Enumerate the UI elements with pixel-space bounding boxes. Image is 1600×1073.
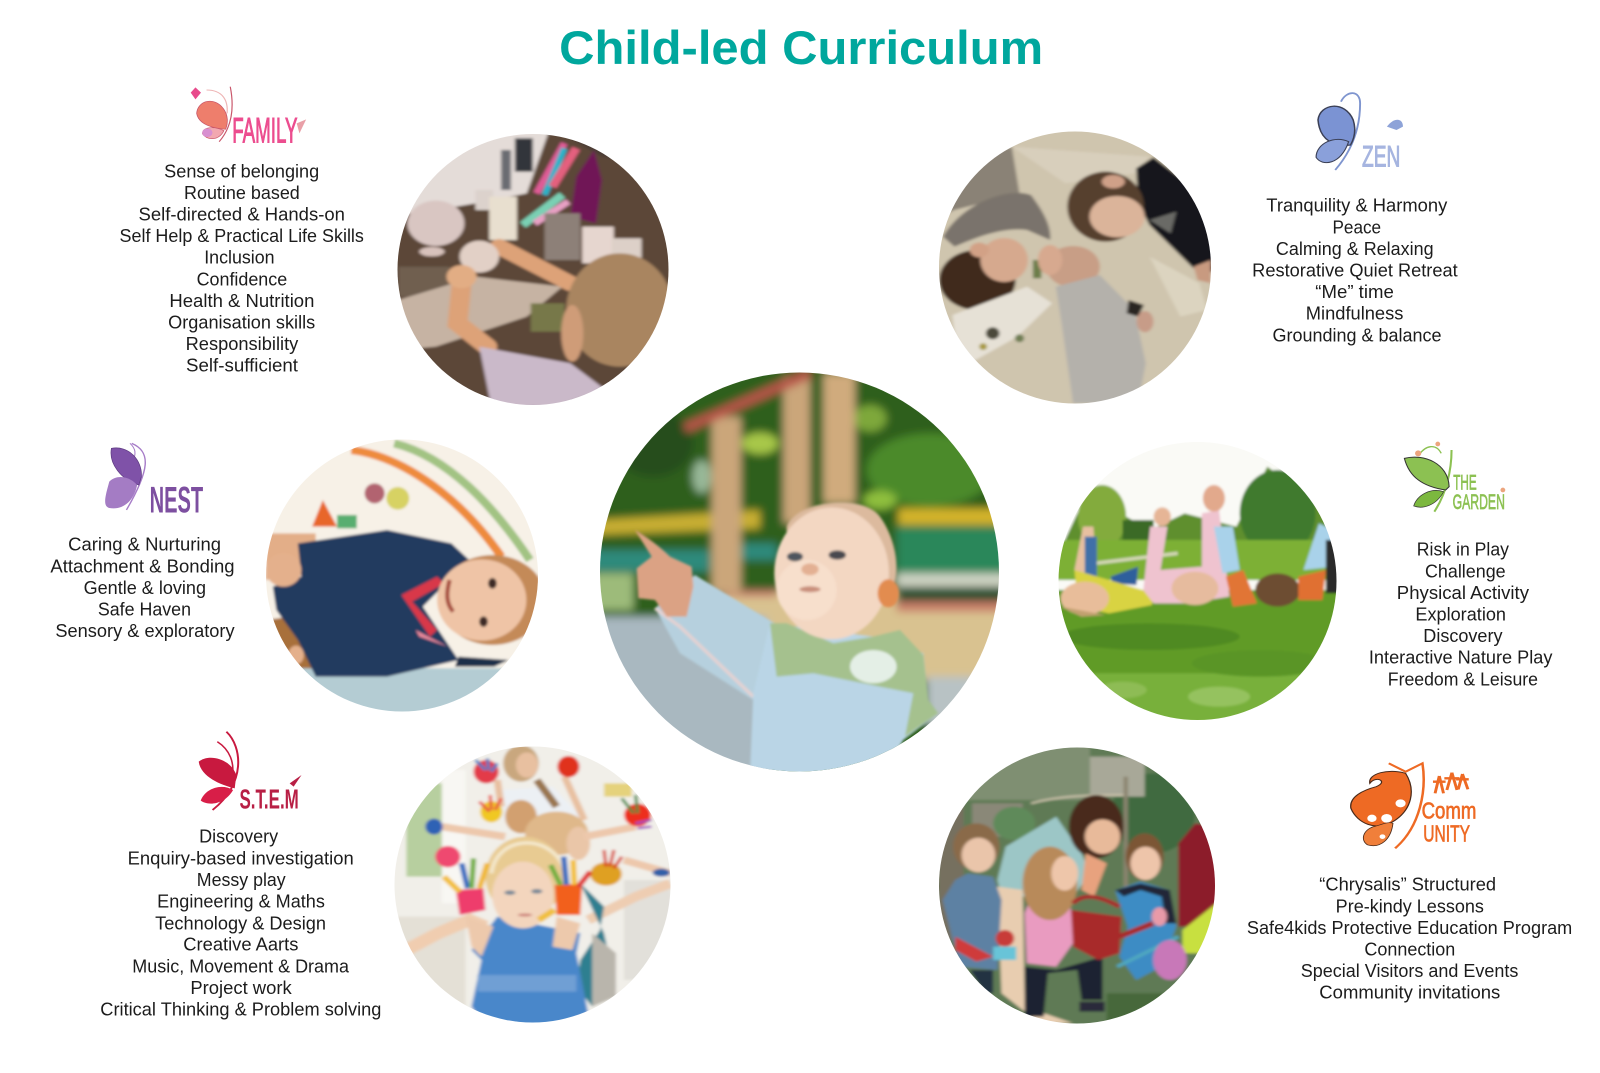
logo: community butterfly: Comm — [1422, 799, 1476, 824]
text list: nest — [50, 535, 235, 641]
text list: garden: Freedom & Leisure — [1388, 669, 1538, 689]
photo: children showing painted hands — [394, 746, 670, 1022]
text list: garden: Physical Activity — [1397, 583, 1529, 603]
text list: community: “Chrysalis” Structured — [1319, 875, 1496, 895]
text list: stem: Enquiry-based investigation — [128, 848, 354, 868]
text list: zen: Calming & Relaxing — [1276, 239, 1434, 259]
text list: family: Sense of belonging — [164, 161, 319, 181]
photo: three children lying on a bed — [939, 132, 1211, 404]
text list: garden: Challenge — [1425, 561, 1506, 581]
text list: community: Community invitations — [1319, 983, 1500, 1003]
text list: garden: Interactive Nature Play — [1369, 648, 1552, 668]
logo: family butterfly — [191, 87, 306, 151]
text list: community: Connection — [1364, 939, 1455, 959]
text list: family: Responsibility — [186, 334, 298, 354]
text list: nest: Sensory & exploratory — [55, 621, 235, 641]
text list: stem: Discovery — [199, 827, 278, 847]
text list: family: Self-sufficient — [186, 356, 298, 376]
text list: family: Self Help & Practical Life Skills — [120, 226, 364, 246]
logo: the garden butterfly: GARDEN — [1453, 489, 1505, 514]
panel: stem — [100, 732, 691, 1037]
text list: family: Inclusion — [204, 248, 275, 268]
text list: family: Health & Nutrition — [169, 291, 314, 311]
text list: community: Special Visitors and Events — [1301, 961, 1518, 981]
text list: zen: Peace — [1332, 217, 1381, 237]
logo: community butterfly — [1351, 763, 1476, 848]
text list: family: Organisation skills — [168, 313, 315, 333]
photo: children lying in the grass with hands raised — [1058, 442, 1336, 720]
text list: nest: Gentle & loving — [84, 578, 206, 598]
text list: garden: Discovery — [1423, 626, 1502, 646]
panel: community — [930, 740, 1572, 1033]
text list: stem: Technology & Design — [155, 913, 326, 933]
text list: stem: Project work — [190, 978, 293, 998]
text list: community: Safe4kids Protective Education Program — [1247, 918, 1572, 938]
text list: zen: Tranquility & Harmony — [1266, 196, 1447, 216]
text list: zen: Grounding & balance — [1272, 325, 1442, 345]
text list: family: Routine based — [184, 183, 300, 203]
photo: child pouring water at kitchen counter — [398, 134, 668, 405]
text list: stem: Engineering & Maths — [157, 892, 325, 912]
text list: garden — [1369, 540, 1552, 689]
text list: zen — [1252, 196, 1458, 345]
logo: the garden butterfly: THE — [1453, 470, 1477, 494]
photo: parent and children watering a garden — [939, 748, 1215, 1024]
panel: garden — [1058, 442, 1552, 720]
logo: zen butterfly: ZEN — [1362, 140, 1400, 173]
panel: zen — [920, 93, 1458, 420]
text list: community — [1247, 875, 1572, 1003]
panel: nest — [50, 440, 538, 712]
logo: nest butterfly: NEST — [150, 480, 203, 521]
logo: family butterfly: FAMILY — [232, 111, 297, 151]
logo: stem butterfly — [199, 732, 302, 815]
text list: nest: Attachment & Bonding — [50, 556, 235, 576]
text list: stem: Critical Thinking & Problem solving — [100, 999, 381, 1019]
text list: zen: Mindfulness — [1306, 304, 1403, 324]
photo: smiling baby lying on a play mat — [266, 440, 538, 712]
logo: stem butterfly: S.T.E.M — [239, 783, 299, 815]
logo: zen butterfly — [1316, 93, 1403, 173]
text list: nest: Caring & Nurturing — [68, 535, 221, 555]
text list: garden: Risk in Play — [1417, 540, 1509, 560]
text list: stem: Music, Movement & Drama — [132, 956, 350, 976]
text list: stem: Creative Aarts — [183, 935, 298, 955]
text list: community: Pre-kindy Lessons — [1336, 896, 1484, 916]
text list: zen: “Me” time — [1315, 282, 1394, 302]
panel: family — [120, 87, 689, 420]
text list: zen: Restorative Quiet Retreat — [1252, 260, 1458, 280]
text list: family: Confidence — [197, 269, 287, 289]
title: Child-led Curriculum — [559, 21, 1043, 74]
text list: stem — [100, 827, 381, 1019]
text list: family: Self-directed & Hands-on — [138, 205, 345, 225]
logo: nest butterfly — [105, 443, 203, 521]
text list: family — [120, 161, 364, 376]
logo: community butterfly: UNITY — [1423, 822, 1470, 847]
text list: garden: Exploration — [1415, 604, 1506, 624]
photo: central baby pointing at a playground — [600, 372, 999, 772]
text list: nest: Safe Haven — [98, 600, 191, 620]
logo: the garden butterfly — [1404, 442, 1505, 514]
text list: stem: Messy play — [197, 870, 286, 890]
